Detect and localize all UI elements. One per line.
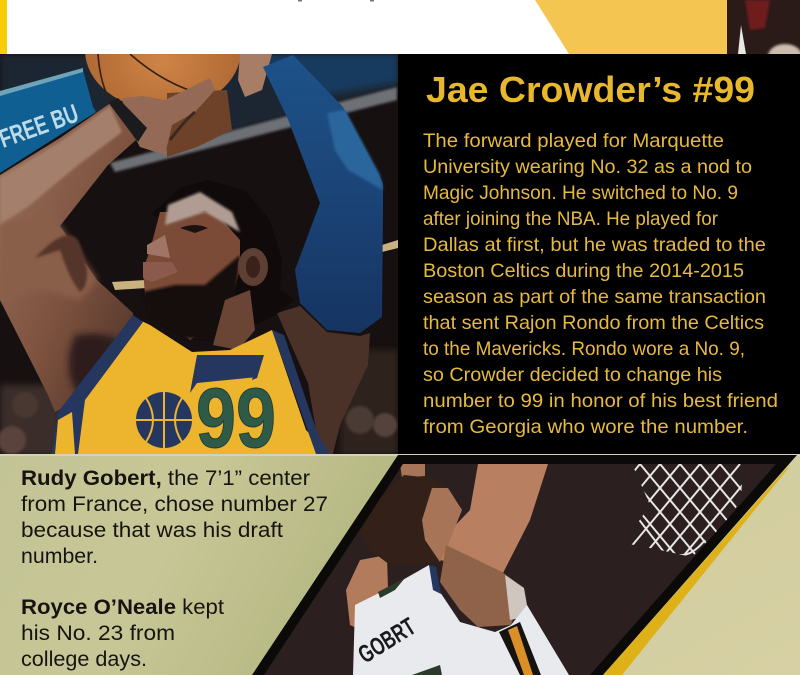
- body text: The forward played for Marquette: [423, 130, 724, 152]
- head and face: [143, 191, 280, 349]
- team logo basketball: [136, 392, 192, 448]
- body text: Dallas at first, but he was traded to the: [423, 234, 766, 256]
- text: Royce O'Neale: his No. 23 from: [21, 622, 175, 645]
- text: Royce O'Neale: college days.: [21, 648, 147, 671]
- heading: Jae Crowder’s #99: [426, 69, 755, 110]
- text: Royce O'Neale: Royce O’Neale kept: [21, 596, 224, 619]
- body text: from Georgia who wore the number.: [423, 416, 748, 438]
- top header strip: [0, 0, 800, 68]
- body text: after joining the NBA. He played for: [423, 208, 718, 230]
- body text: Boston Celtics during the 2014-2015: [423, 260, 744, 282]
- upper arm: [277, 306, 370, 454]
- crowd: [0, 385, 60, 455]
- basketball: [85, 54, 240, 102]
- text: Rudy Gobert: [21, 467, 328, 568]
- body text: University wearing No. 32 as a nod to: [423, 156, 752, 178]
- white jersey with name: GOBRT: [353, 612, 421, 669]
- shooting hand: [122, 54, 272, 157]
- head: [372, 475, 419, 563]
- torso: [440, 545, 524, 627]
- body text: to the Mavericks. Rondo wore a No. 9,: [423, 338, 745, 360]
- text: Rudy Gobert: because that was his draft: [21, 519, 283, 542]
- body text: season as part of the same transaction: [423, 286, 766, 308]
- text: Rudy Gobert: number.: [21, 545, 98, 568]
- white jersey with name: [353, 565, 569, 675]
- text: Royce O'Neale: [21, 596, 224, 671]
- body text: Magic Johnson. He switched to No. 9: [423, 182, 738, 204]
- compression sleeve: [263, 55, 383, 333]
- panel: Jae Crowder text: [398, 54, 800, 455]
- shooting arm: [0, 102, 136, 412]
- panel: lower textured background: [0, 454, 800, 675]
- arena beams: [110, 87, 397, 172]
- yellow jersey with number 99: 99: [196, 371, 276, 465]
- text: Rudy Gobert: Rudy Gobert, the 7’1” center: [21, 467, 310, 490]
- body text: so Crowder decided to change his: [423, 364, 722, 386]
- arena banner with lettering: [0, 68, 96, 173]
- body text: number to 99 in honor of his best friend: [423, 390, 778, 412]
- body text: that sent Rajon Rondo from the Celtics: [423, 312, 764, 334]
- body text: [423, 130, 778, 438]
- text: Rudy Gobert: from France, chose number 27: [21, 493, 328, 516]
- basketball net: [632, 464, 742, 556]
- yellow jersey with number 99: [52, 315, 330, 465]
- arms: [400, 464, 425, 478]
- panel: Rudy Gobert dunk photo: [252, 455, 800, 675]
- panel: player photo of Jae Crowder: [0, 54, 398, 454]
- arena upper band: [0, 54, 398, 140]
- wristband: [108, 98, 147, 142]
